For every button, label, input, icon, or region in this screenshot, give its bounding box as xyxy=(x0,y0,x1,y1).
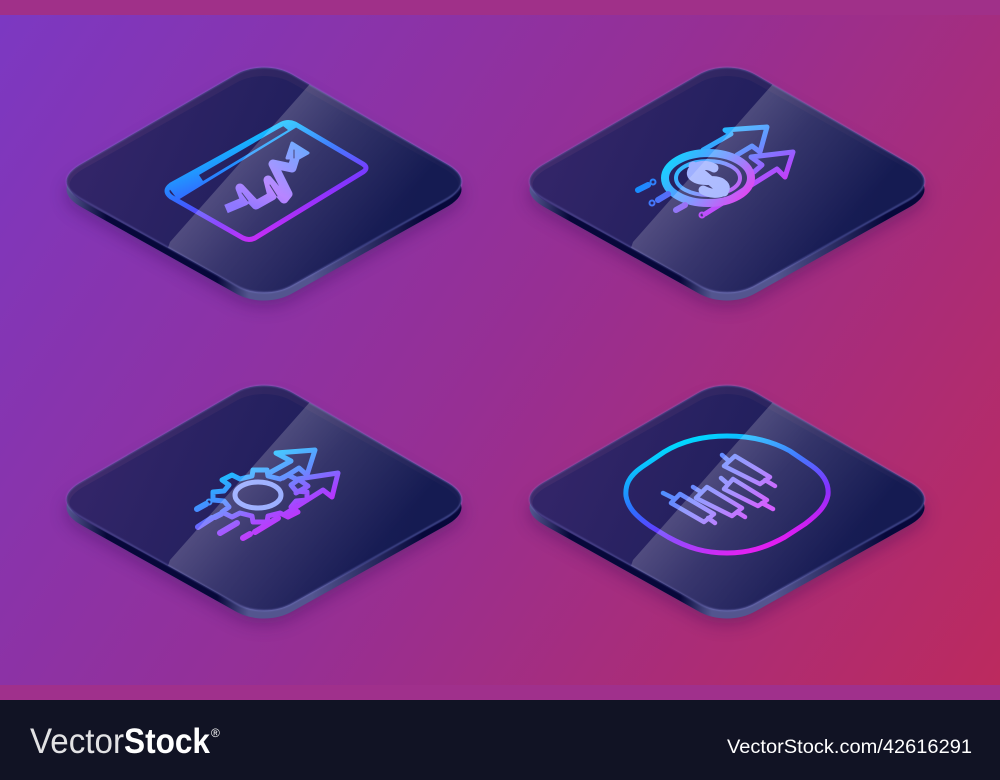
icon: zigzag rising arrow xyxy=(226,143,308,209)
icon: browser window xyxy=(167,122,366,240)
icon: speed dashes xyxy=(638,180,685,210)
footer bar xyxy=(0,700,1000,780)
tile: candlestick chart xyxy=(530,378,943,624)
logo wordmark: Vector xyxy=(30,722,124,761)
image id: VectorStock.com/42616291 xyxy=(727,737,972,758)
background bottom strip xyxy=(0,685,1000,700)
tile: gear with arrows xyxy=(66,378,480,624)
tile: browser window with rising chart xyxy=(66,60,480,306)
logo wordmark: Stock xyxy=(124,722,210,761)
background top strip xyxy=(0,0,1000,15)
logo wordmark xyxy=(30,722,220,761)
tile: dollar coin with arrows xyxy=(530,60,943,306)
icon: gear xyxy=(213,470,307,522)
icon: rounded frame xyxy=(626,436,828,553)
icon: dollar coin xyxy=(665,153,751,203)
logo wordmark: ® xyxy=(211,726,220,740)
icon: speed dashes xyxy=(197,500,278,538)
icon: candlesticks xyxy=(663,455,775,523)
icon: growth arrows xyxy=(271,450,338,514)
icon: growth arrows xyxy=(700,127,793,218)
